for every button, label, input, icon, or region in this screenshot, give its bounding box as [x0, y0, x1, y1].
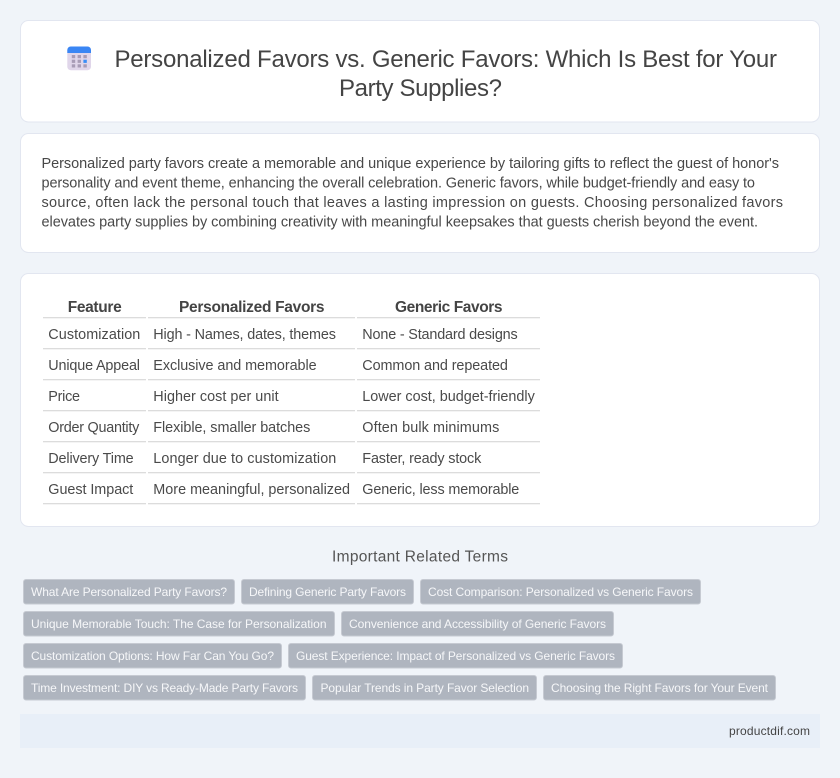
panel: intro text	[20, 134, 820, 252]
row: unique appeal: Common and repeated	[362, 358, 508, 374]
tag: convenience: Convenience and Accessibility of Generic Favors	[349, 617, 606, 631]
tag: convenience	[342, 612, 614, 636]
row: price: Higher cost per unit	[153, 389, 279, 405]
row: unique appeal	[48, 358, 508, 374]
panel: comparison table	[20, 274, 820, 526]
intro paragraph: source, often lack the personal touch that leaves a lasting impression on guests. Choosing personalized favors	[42, 195, 783, 211]
row: delivery time: Delivery Time	[48, 451, 134, 467]
footer source: productdif.com	[729, 724, 810, 738]
row: price	[48, 389, 536, 405]
row: guest impact: Generic, less memorable	[362, 482, 519, 498]
tag: what are personalized favors: What Are Personalized Party Favors?	[31, 585, 227, 599]
intro paragraph	[42, 156, 783, 231]
tag: choosing right favors: Choosing the Right Favors for Your Event	[551, 681, 769, 695]
tag: customization options	[24, 644, 282, 668]
row: price: Price	[48, 389, 80, 405]
row: order quantity: Flexible, smaller batches	[153, 420, 310, 436]
tag: customization options: Customization Options: How Far Can You Go?	[31, 649, 274, 663]
row: guest impact: More meaningful, personalized	[153, 482, 350, 498]
tag: defining generic favors	[242, 580, 414, 604]
table header	[68, 299, 502, 316]
intro paragraph: personality and event theme, enhancing the overall celebration. Generic favors, while budget-friendly and easy to	[42, 176, 755, 192]
row: order quantity: Often bulk minimums	[362, 420, 499, 436]
table header: Feature	[68, 299, 122, 316]
tag: cost comparison: Cost Comparison: Personalized vs Generic Favors	[428, 585, 693, 599]
intro paragraph: elevates party supplies by combining creativity with meaningful keepsakes that guests cherish beyond the event.	[42, 215, 758, 231]
row: guest impact: Guest Impact	[48, 482, 133, 498]
row: customization	[48, 327, 518, 343]
tag: defining generic favors: Defining Generic Party Favors	[249, 585, 406, 599]
row: guest impact	[48, 482, 519, 498]
tag: choosing right favors	[544, 676, 776, 700]
title: Party Supplies?	[339, 75, 502, 102]
tag: unique memorable touch: Unique Memorable Touch: The Case for Personalization	[31, 617, 326, 631]
row: unique appeal: Exclusive and memorable	[153, 358, 317, 374]
row: customization: None - Standard designs	[362, 327, 518, 343]
tag: popular trends: Popular Trends in Party Favor Selection	[320, 681, 529, 695]
row: order quantity: Order Quantity	[48, 420, 140, 436]
row: delivery time: Longer due to customization	[153, 451, 336, 467]
tag: guest experience	[288, 644, 622, 668]
tag: what are personalized favors	[24, 580, 234, 604]
heading: related terms: Important Related Terms	[332, 548, 508, 566]
panel: header	[20, 20, 820, 122]
tag: unique memorable touch	[24, 612, 334, 636]
table rules	[43, 317, 540, 504]
row: order quantity	[48, 420, 499, 436]
row: delivery time	[48, 451, 482, 467]
row: price: Lower cost, budget-friendly	[362, 389, 536, 405]
tag: time investment	[24, 676, 306, 700]
tag: guest experience: Guest Experience: Impact of Personalized vs Generic Favors	[296, 649, 615, 663]
tag: popular trends	[312, 676, 536, 700]
row: delivery time: Faster, ready stock	[362, 451, 482, 467]
row: customization: Customization	[48, 327, 140, 343]
related term tags	[24, 580, 776, 700]
tag: time investment: Time Investment: DIY vs Ready-Made Party Favors	[31, 681, 298, 695]
row: unique appeal: Unique Appeal	[48, 358, 140, 374]
title	[114, 46, 777, 102]
table header: Generic Favors	[395, 299, 502, 316]
intro paragraph: Personalized party favors create a memorable and unique experience by tailoring gifts to reflect the guest of honor's	[42, 156, 779, 172]
title: Personalized Favors vs. Generic Favors: Which Is Best for Your	[114, 46, 777, 73]
footer	[20, 714, 820, 748]
table header: Personalized Favors	[179, 299, 324, 316]
tag: cost comparison	[420, 580, 700, 604]
icon: calendar	[67, 46, 91, 70]
row: customization: High - Names, dates, themes	[153, 327, 336, 343]
